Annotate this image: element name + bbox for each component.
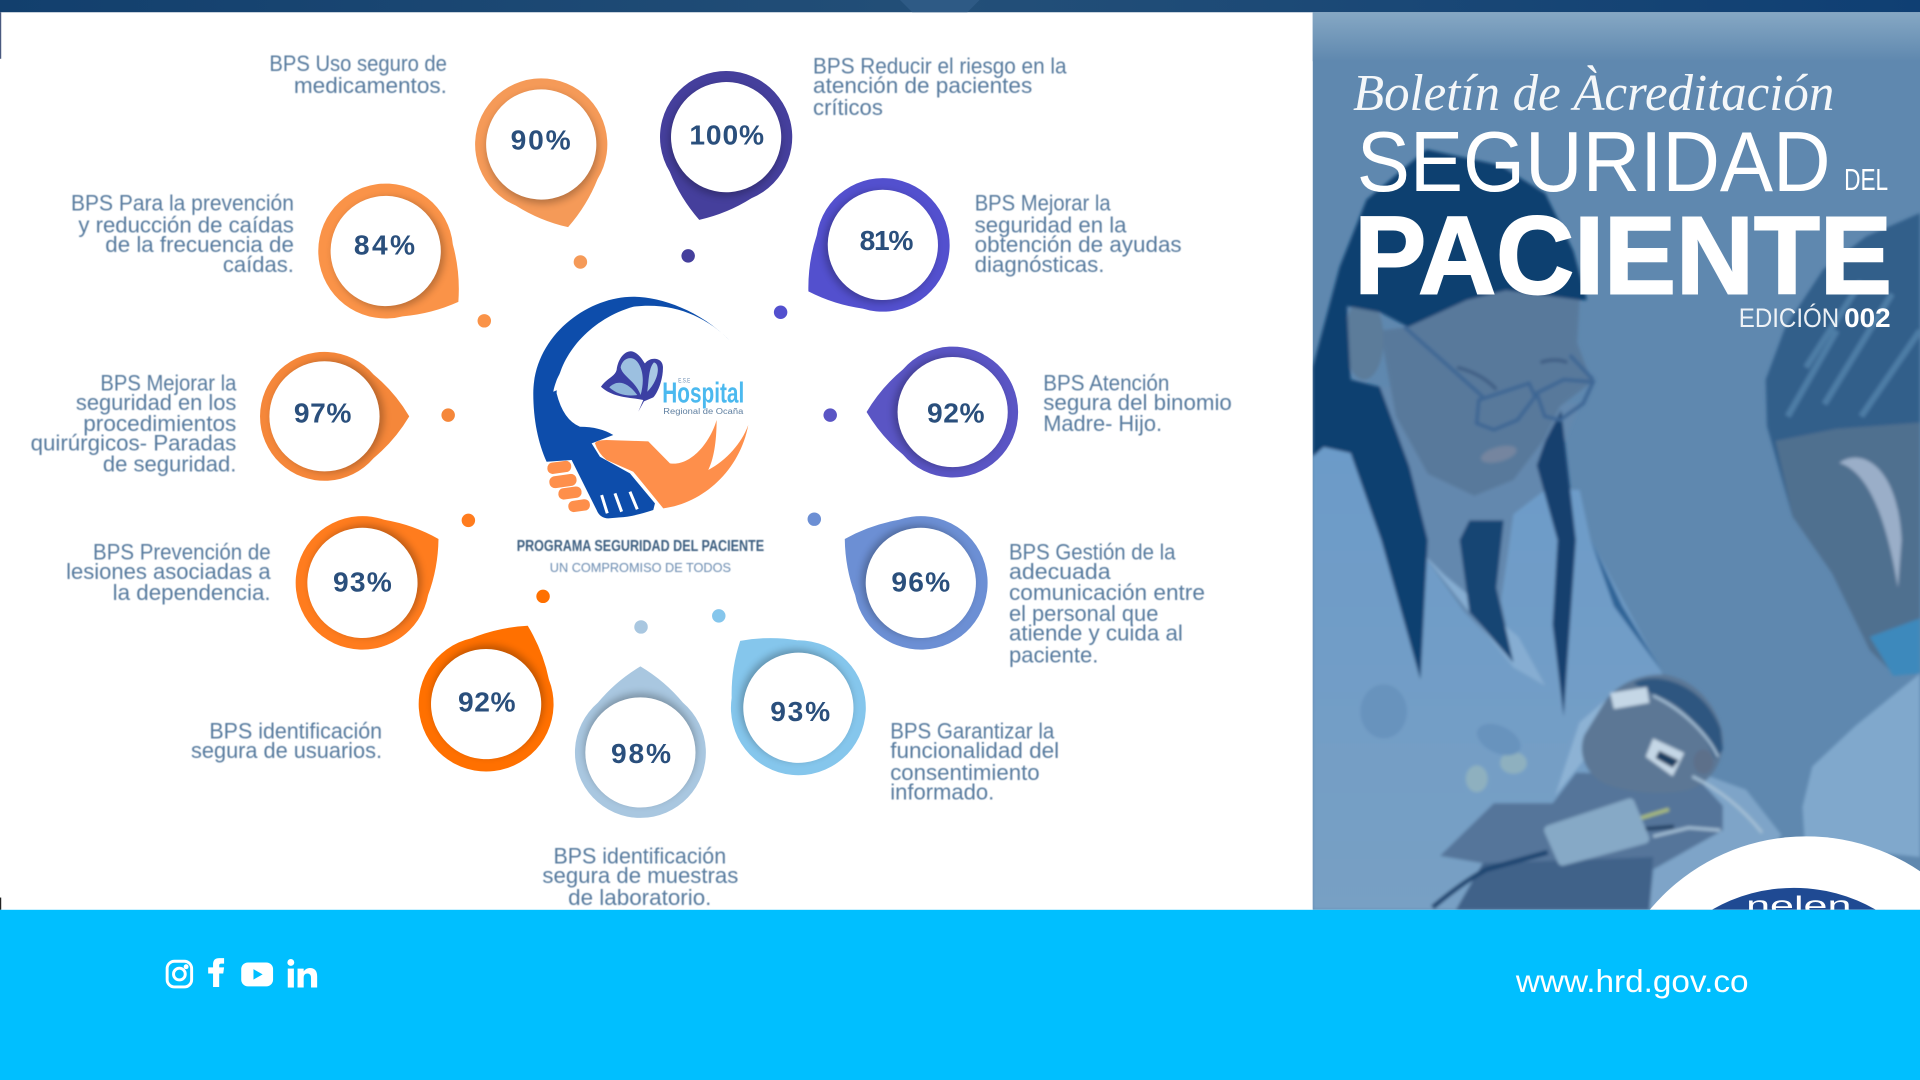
drop: 98%: 98% <box>611 738 671 769</box>
drop: 93% lower right: 93% <box>770 696 830 727</box>
label: comunicación: comunicación entre <box>1009 580 1205 605</box>
photo: ear <box>1344 299 1384 380</box>
photo: nurse ear <box>1839 458 1902 588</box>
label: pacientes críticos: atención de pacientes <box>813 73 1032 98</box>
label: lesiones por dependencia <box>66 540 271 605</box>
badge: blue seal <box>1712 888 1876 910</box>
logo: butterfly <box>601 351 663 412</box>
title: seguridad: SEGURIDAD <box>1357 114 1831 210</box>
label: comunicación: paciente. <box>1009 642 1098 667</box>
photo: glasses <box>1404 327 1593 430</box>
photo: mother's robe <box>1312 445 1662 910</box>
icon: instagram <box>167 961 192 987</box>
logo: central hospital emblem <box>533 297 748 518</box>
label: uso seguro de medicamentos <box>269 51 447 98</box>
photo: baby body and hands <box>1440 772 1724 874</box>
label: lesiones por dependencia: lesiones asociadas a <box>66 559 271 584</box>
label: ayudas diagnósticas: seguridad en la <box>975 213 1127 238</box>
label: procedimientos quirúrgicos: procedimientos <box>83 411 236 436</box>
label: muestras de laboratorio <box>542 843 738 910</box>
drop: 90% <box>458 61 631 248</box>
photo: closed eyes <box>1457 360 1567 389</box>
label: comunicación: el personal que <box>1009 601 1158 626</box>
photo: sensors <box>1610 687 1684 776</box>
photo: blanket <box>1688 776 1782 852</box>
drop: 98% <box>575 666 706 818</box>
drop: 84% <box>292 157 497 357</box>
photo: robe fold near baby <box>1556 702 1604 793</box>
label: consentimiento informado <box>890 718 1059 805</box>
drop: 90%: 90% <box>511 124 571 155</box>
drop: 93% left <box>271 481 472 674</box>
label: uso seguro de medicamentos: BPS Uso seguro de <box>269 51 447 76</box>
photo: baby ear <box>1695 751 1712 772</box>
photo: neck <box>1377 386 1566 630</box>
drop: 81% <box>773 153 975 348</box>
photo: nurse face and neck <box>1776 422 1920 673</box>
label: procedimientos quirúrgicos: de seguridad. <box>103 451 236 476</box>
label: binomio madre-hijo: BPS Atención <box>1043 371 1169 396</box>
logo: hospital name: Hospital <box>662 377 744 409</box>
label: lesiones por dependencia: la dependencia. <box>113 580 271 605</box>
photo: face <box>1380 290 1592 496</box>
label: consentimiento informado: consentimiento <box>890 760 1040 785</box>
drop: 92% lower left <box>395 594 587 795</box>
icon: linkedin <box>287 959 317 988</box>
label: pacientes críticos: críticos <box>813 95 883 120</box>
title: edición: 002 <box>1844 303 1891 333</box>
label: identificación de usuarios: segura de usuarios. <box>191 738 382 763</box>
label: prevención de caídas: BPS Para la prevención <box>71 191 294 216</box>
drop: 92% lower left: 92% <box>458 686 516 717</box>
badge: seal text: nelen <box>1746 893 1851 921</box>
icon: facebook <box>208 958 224 987</box>
label: prevención de caídas: y reducción de caídas <box>78 213 294 238</box>
programme caption <box>517 538 764 575</box>
label: binomio madre-hijo: segura del binomio <box>1043 390 1232 415</box>
drop: 97% <box>260 352 409 481</box>
photo: monitor device <box>1549 803 1644 861</box>
drop: 100%: 100% <box>689 119 764 150</box>
label: procedimientos quirúrgicos <box>31 371 237 476</box>
photo: baby head <box>1582 675 1723 793</box>
label: identificación de usuarios: BPS identificación <box>209 718 382 743</box>
website url: www.hrd.gov.co <box>1515 963 1749 999</box>
label: comunicación: atiende y cuida al <box>1009 620 1183 645</box>
label: procedimientos quirúrgicos: seguridad en los <box>76 390 236 415</box>
label: lesiones por dependencia: BPS Prevención de <box>93 540 271 565</box>
label: prevención de caídas <box>71 191 294 277</box>
drop: 97%: 97% <box>294 397 351 428</box>
label: binomio madre-hijo: Madre- Hijo. <box>1043 411 1162 436</box>
label: consentimiento informado: informado. <box>890 780 994 805</box>
programme caption: UN COMPROMISO DE TODOS <box>550 560 731 575</box>
drop: 84%: 84% <box>354 230 415 261</box>
photo: nurse hair <box>1766 213 1920 540</box>
photo: baby hair <box>1633 678 1723 759</box>
drop: 96%: 96% <box>891 566 950 597</box>
label: comunicación <box>1009 540 1205 667</box>
logo: blue hand and arc <box>533 297 730 518</box>
label: muestras de laboratorio: BPS identificación <box>553 843 726 868</box>
label: uso seguro de medicamentos: medicamentos. <box>294 73 447 98</box>
label: pacientes críticos <box>813 53 1067 120</box>
title: edición: EDICIÓN <box>1739 302 1839 333</box>
drop: 100% <box>636 54 809 240</box>
panel: cover photo <box>1313 12 1920 921</box>
photo: nurse coat <box>1802 673 1920 857</box>
label: comunicación: adecuada <box>1009 559 1111 584</box>
drop: 92% right: 92% <box>927 397 984 428</box>
photo: robe collar <box>1426 558 1543 684</box>
drop: 92% right <box>867 347 1018 478</box>
logo: regional: Regional de Ocaña <box>663 407 744 416</box>
label: consentimiento informado: BPS Garantizar la <box>890 718 1055 743</box>
photo: wires <box>1653 776 1762 836</box>
label: procedimientos quirúrgicos: BPS Mejorar la <box>100 371 237 396</box>
label: comunicación: BPS Gestión de la <box>1009 540 1176 565</box>
panel: footer <box>0 910 1920 1080</box>
label: ayudas diagnósticas <box>975 191 1182 277</box>
label: binomio madre-hijo <box>1043 371 1232 436</box>
label: ayudas diagnósticas: obtención de ayudas <box>975 232 1182 257</box>
title: boletín: Boletín de Àcreditación <box>1353 65 1834 122</box>
title: del: DEL <box>1844 163 1888 197</box>
label: identificación de usuarios <box>191 718 382 763</box>
label: ayudas diagnósticas: BPS Mejorar la <box>975 191 1111 216</box>
drop: 81%: 81% <box>860 225 913 256</box>
drop: 96% <box>811 481 1012 674</box>
label: ayudas diagnósticas: diagnósticas. <box>975 252 1104 277</box>
programme caption: PROGRAMA SEGURIDAD DEL PACIENTE <box>517 538 764 555</box>
badge: white circle <box>1650 836 1920 910</box>
label: muestras de laboratorio: segura de muestras <box>542 863 738 888</box>
label: procedimientos quirúrgicos: quirúrgicos- Paradas <box>31 431 236 456</box>
title: paciente: PACIENTE <box>1354 194 1892 317</box>
logo: orange hand <box>547 420 748 513</box>
label: pacientes críticos: BPS Reducir el riesgo en la <box>813 53 1067 78</box>
logo: e.s.e.: E.S.E <box>678 379 690 385</box>
connector dots <box>441 249 837 634</box>
label: muestras de laboratorio: de laboratorio. <box>568 885 711 910</box>
photo: head band <box>1653 696 1718 757</box>
photo: robe buttons and embroidery <box>1500 752 1527 774</box>
drop: 93% left: 93% <box>333 566 392 597</box>
photo: cable <box>1433 852 1548 907</box>
photo: nurse mask <box>1870 618 1920 676</box>
photo: lips <box>1480 445 1517 464</box>
drop: 93% lower right <box>689 597 894 803</box>
label: prevención de caídas: caídas. <box>223 252 294 277</box>
photo: hair <box>1313 149 1587 680</box>
label: consentimiento informado: funcionalidad del <box>890 738 1059 763</box>
icon: youtube <box>241 962 273 986</box>
label: prevención de caídas: de la frecuencia de <box>105 232 294 257</box>
